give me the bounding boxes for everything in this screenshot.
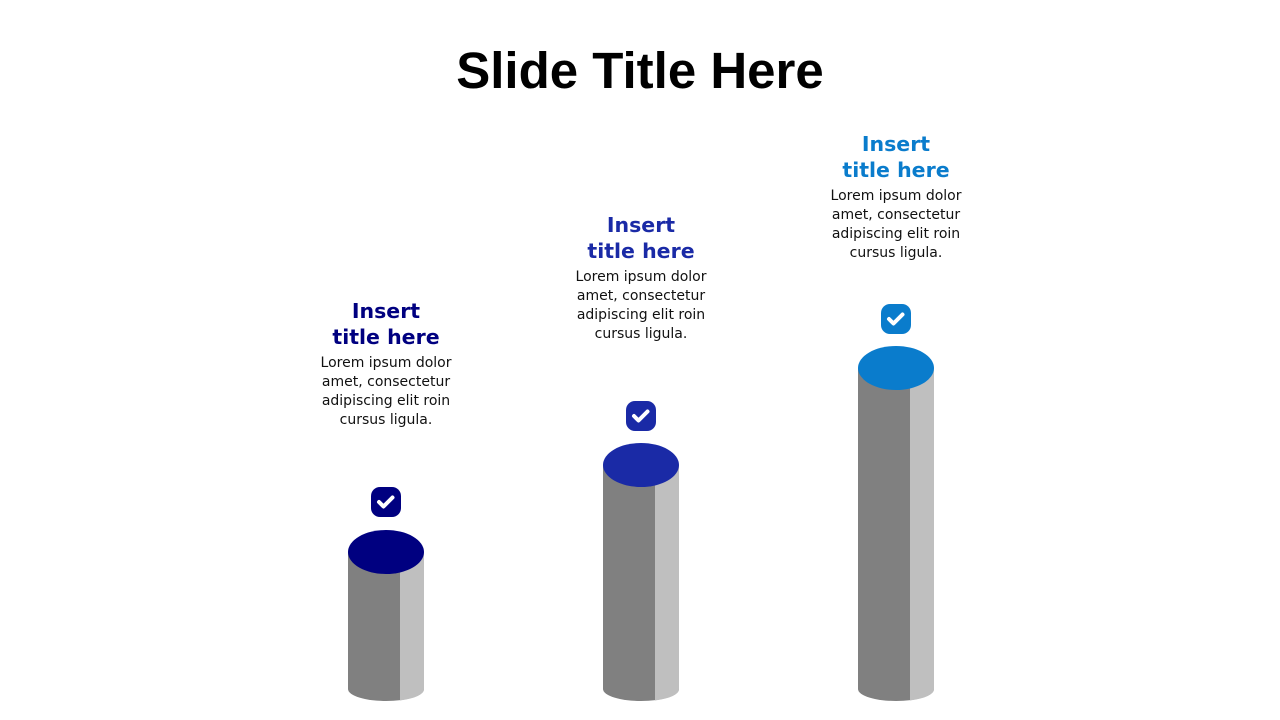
text block 2	[576, 213, 706, 342]
text block 1	[321, 299, 452, 428]
text block 2: Lorem ipsum dolor	[576, 269, 706, 285]
icon: check 1	[371, 487, 401, 517]
text block 1: title here	[332, 325, 440, 349]
text block 1: adipiscing elit roin	[322, 393, 450, 409]
text block 1: Lorem ipsum dolor	[321, 355, 451, 371]
title: Slide Title Here	[456, 42, 824, 99]
text block 3: cursus ligula.	[850, 245, 942, 261]
text block 3: Insert	[862, 132, 930, 156]
text block 1: Insert	[352, 299, 420, 323]
text block 3: amet, consectetur	[832, 207, 960, 223]
cylinder 1	[348, 530, 424, 701]
cylinder 2	[603, 443, 679, 701]
text block 2: Insert	[607, 213, 675, 237]
text block 2: adipiscing elit roin	[577, 307, 705, 323]
text block 2: title here	[587, 239, 695, 263]
text block 3	[831, 132, 962, 261]
text block 2: cursus ligula.	[595, 326, 687, 342]
text block 1: cursus ligula.	[340, 412, 432, 428]
text block 3: adipiscing elit roin	[832, 226, 960, 242]
text block 2: amet, consectetur	[577, 288, 705, 304]
cylinder 3	[858, 346, 934, 701]
text block 1: amet, consectetur	[322, 374, 450, 390]
icon: check 3	[881, 304, 911, 334]
icon: check 2	[626, 401, 656, 431]
text block 3: Lorem ipsum dolor	[831, 188, 961, 204]
text block 3: title here	[842, 158, 950, 182]
